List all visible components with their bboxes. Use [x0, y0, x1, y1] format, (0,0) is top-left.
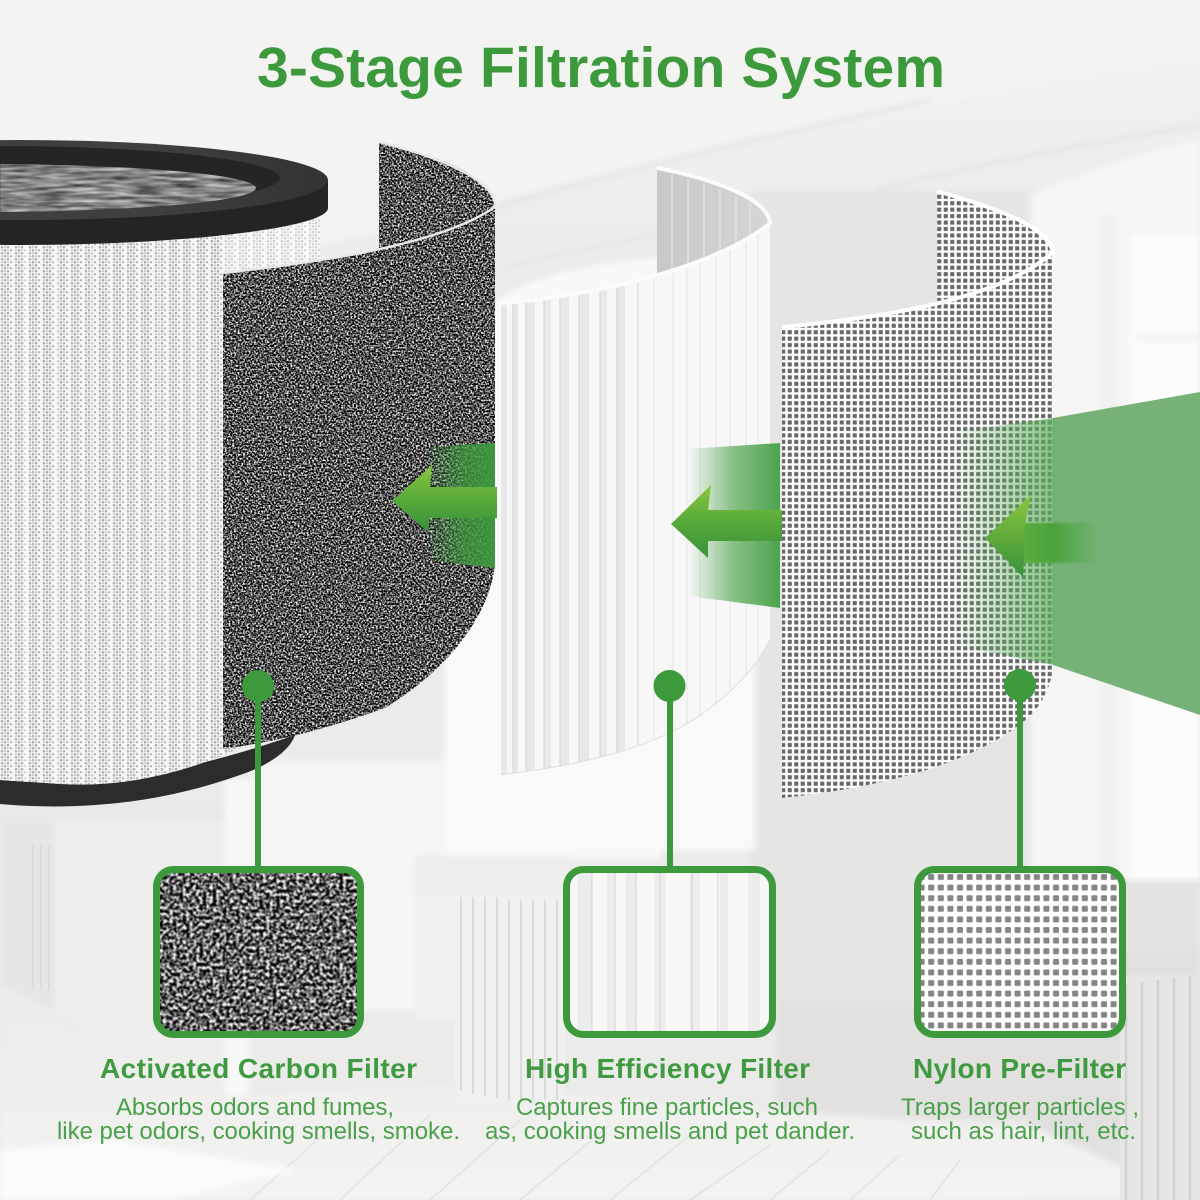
filter cartridge [0, 140, 328, 806]
panel: activated carbon filter sheet [215, 135, 505, 760]
radiator: right [1120, 975, 1200, 1200]
text block: nylon pre-filter: Traps larger particles , [901, 1094, 1139, 1121]
callout: high efficiency connector [654, 670, 686, 871]
text block: nylon pre-filter: such as hair, lint, etc. [911, 1118, 1136, 1145]
mesh sheet front [782, 252, 1053, 798]
carbon sheet back [379, 143, 494, 248]
text block: activated carbon filter: like pet odors, cooking smells, smoke. [57, 1118, 460, 1145]
airflow beam: high efficiency stage [688, 443, 780, 608]
arrow: high efficiency stage [671, 485, 782, 558]
cartridge pleated body [0, 200, 325, 800]
callout: activated carbon connector [242, 670, 274, 871]
panel: nylon pre-filter sheet [782, 191, 1053, 798]
floor [0, 985, 1200, 1200]
text block: nylon pre-filter: Nylon Pre-Filter [913, 1053, 1126, 1084]
arrow: pre-filter stage [985, 495, 1102, 577]
text block: high efficiency filter: Captures fine particles, such [516, 1094, 818, 1121]
text block: activated carbon filter [57, 1053, 460, 1145]
text block: nylon pre-filter [901, 1053, 1139, 1145]
carbon sheet front [215, 200, 505, 760]
radiator: centre [455, 895, 565, 1100]
text block: activated carbon filter: Absorbs odors and fumes, [116, 1094, 394, 1121]
pleated sheet back [657, 168, 770, 278]
text block: activated carbon filter: Activated Carbon Filter [100, 1053, 417, 1084]
swatch: activated carbon close-up [153, 866, 364, 1038]
text block: high efficiency filter: as, cooking smells and pet dander. [485, 1118, 855, 1145]
pleated sheet front [495, 200, 775, 780]
airflow beam: incoming air [950, 392, 1200, 715]
mesh sheet back [937, 192, 1052, 304]
text block: high efficiency filter [485, 1053, 855, 1145]
arrow: carbon stage [392, 465, 497, 532]
title: 3-Stage Filtration System [257, 36, 945, 100]
swatch: high efficiency close-up [560, 865, 780, 1040]
radiator: left [33, 845, 49, 990]
callout: pre-filter connector [1004, 669, 1036, 871]
swatch: nylon mesh close-up [917, 870, 1123, 1035]
cartridge top ring [0, 140, 328, 245]
panel: high efficiency filter sheet [495, 168, 775, 780]
airflow beam: carbon stage [425, 443, 495, 568]
cartridge bottom ring [0, 735, 295, 806]
text block: high efficiency filter: High Efficiency Filter [525, 1053, 810, 1084]
